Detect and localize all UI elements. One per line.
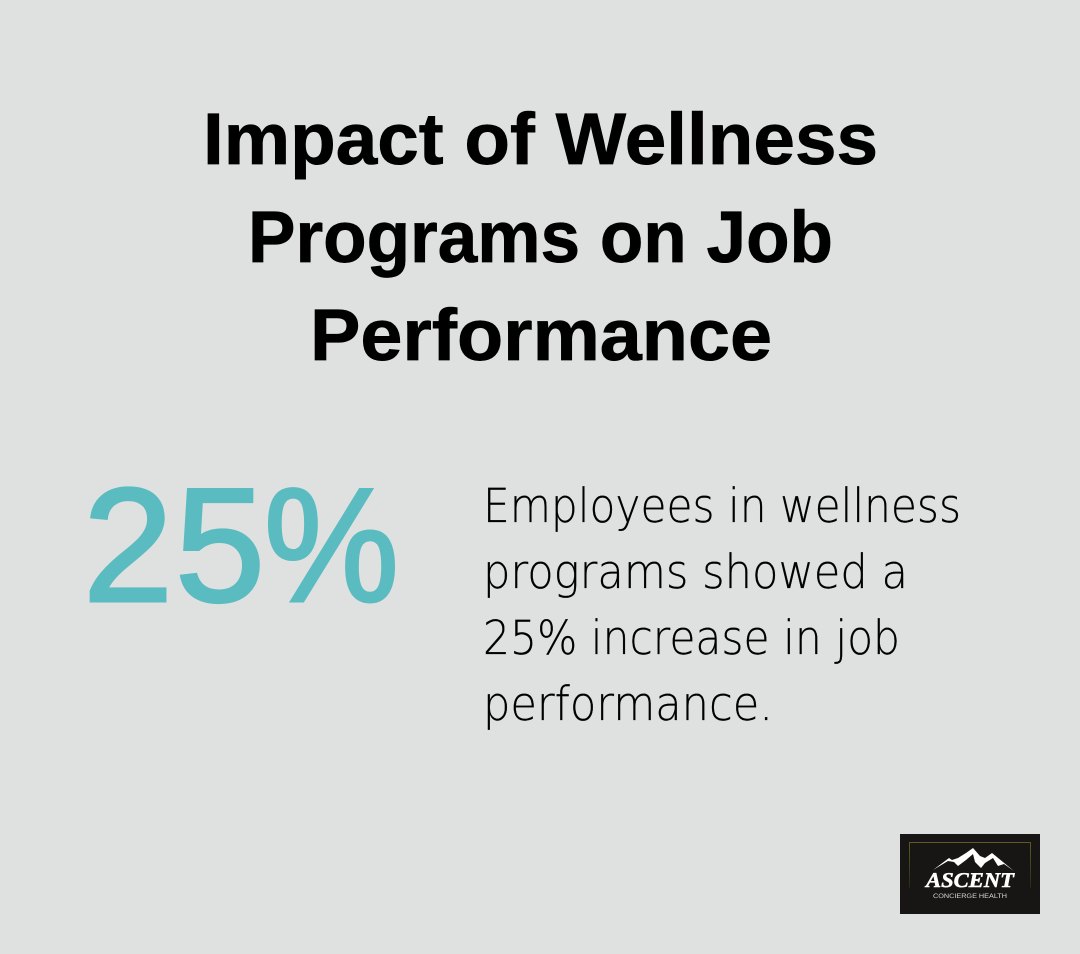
big stat: 25%: %	[264, 455, 399, 636]
title: Programs on Job	[248, 197, 833, 278]
stat description: performance.	[483, 677, 773, 732]
logo: Ascent Concierge Health	[900, 834, 1040, 914]
stat description: 25% increase in job	[483, 611, 900, 666]
title	[203, 99, 878, 376]
title: Impact of Wellness	[203, 99, 878, 180]
stat description: Employees in wellness	[483, 479, 961, 534]
logo tagline: CONCIERGE HEALTH	[933, 893, 1007, 900]
stat description: programs showed a	[483, 545, 908, 600]
title: Performance	[310, 295, 772, 376]
big stat: 25%: 2	[83, 455, 173, 636]
icon: mountains	[933, 848, 1014, 871]
stat description	[483, 479, 961, 732]
big stat: 25%: 5	[175, 455, 265, 636]
logo wordmark: ASCENT	[924, 868, 1015, 892]
